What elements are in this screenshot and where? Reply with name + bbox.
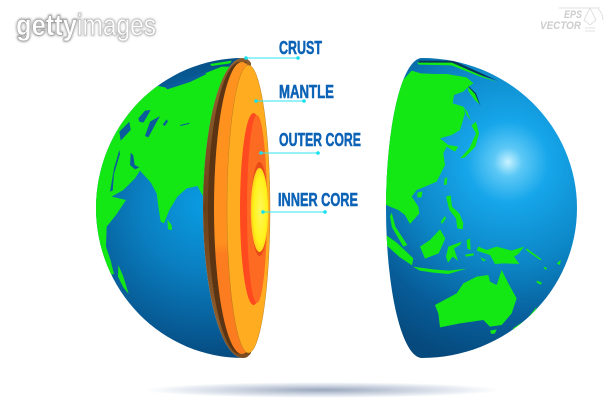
right continents [380, 61, 561, 334]
label: crust [244, 38, 322, 60]
label: outer core [259, 130, 361, 155]
left continents: Eurasia and Africa [87, 61, 233, 294]
upper mantle [214, 62, 270, 354]
lower mantle [227, 65, 270, 353]
label: mantle: MANTLE [279, 82, 334, 102]
Tasmania [490, 329, 497, 334]
watermark: EPS vector badge: EPS [564, 9, 583, 21]
label: crust: CRUST [279, 38, 322, 58]
watermark: gettyimages logo: images [77, 9, 156, 42]
Kamchatka [467, 86, 479, 104]
Japan [460, 122, 479, 158]
outer core [240, 113, 267, 305]
watermark: gettyimages logo [16, 9, 156, 42]
watermark: EPS vector badge: VECTOR [540, 20, 581, 32]
Taiwan and Hainan [417, 177, 447, 197]
left half globe [87, 58, 243, 358]
Borneo [420, 229, 445, 259]
Philippines [446, 195, 463, 229]
left inland seas [110, 73, 207, 192]
watermark: EPS vector badge [540, 8, 603, 32]
right half globe [380, 58, 577, 358]
crust layer [203, 58, 251, 358]
label: inner core: INNER CORE [278, 190, 358, 210]
watermark: gettyimages logo: getty [16, 9, 77, 42]
left ocean [96, 58, 243, 358]
ground shadow [144, 382, 500, 398]
New Zealand [513, 307, 537, 329]
Australia [435, 270, 517, 327]
watermark: gettyimages logo: images [77, 9, 156, 42]
label: outer core: OUTER CORE [279, 130, 361, 150]
Sumatra [386, 235, 413, 265]
Asia [417, 63, 497, 82]
small islands [441, 216, 561, 285]
watermark: gettyimages logo: getty [16, 9, 77, 42]
Malay peninsula [390, 213, 407, 247]
coast shadows [418, 61, 497, 106]
Sulawesi [446, 242, 462, 263]
Java and lesser Sunda [413, 267, 467, 274]
Sakhalin [463, 107, 471, 121]
right ocean [386, 58, 577, 358]
cross-section of Earth's layers [203, 58, 270, 358]
New Guinea [477, 247, 524, 264]
label: mantle [254, 82, 334, 103]
inner core [251, 162, 268, 256]
label: inner core [261, 190, 358, 214]
